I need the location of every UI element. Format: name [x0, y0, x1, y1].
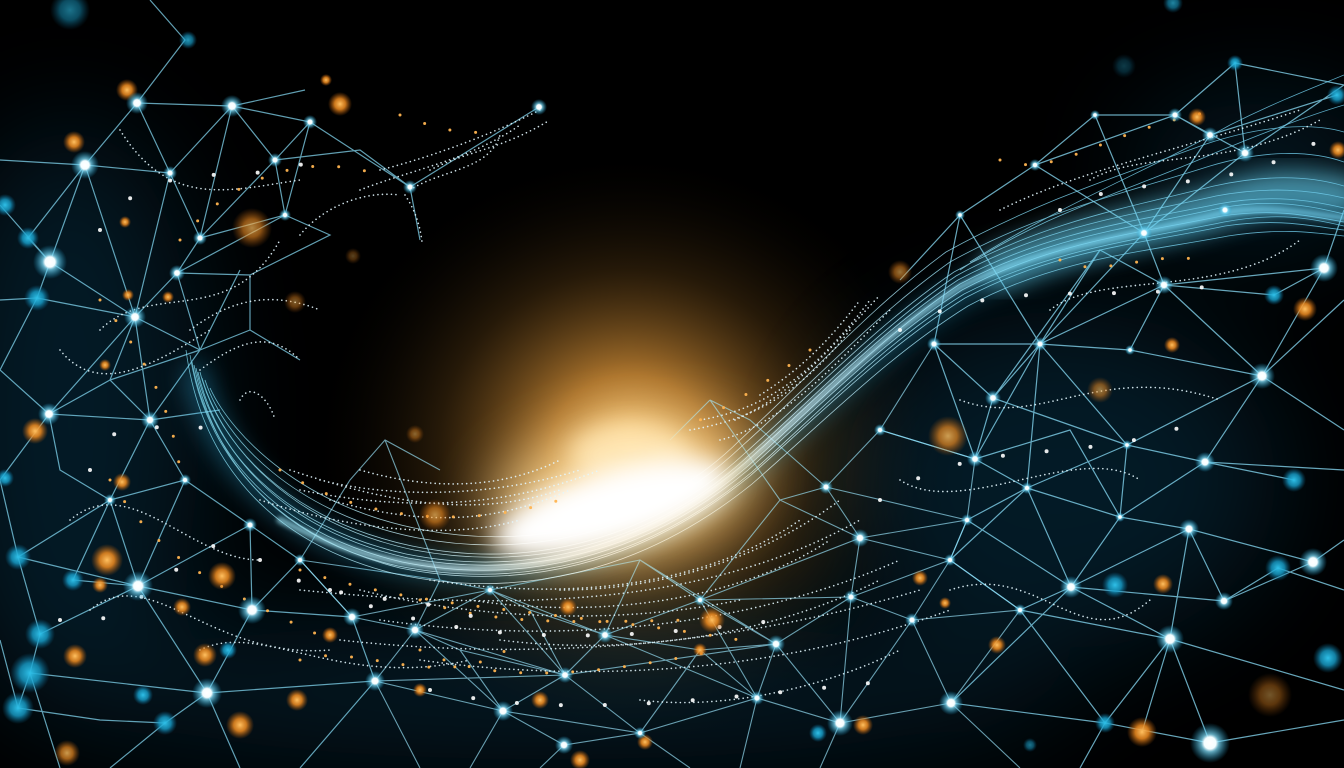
particle dust	[60, 110, 1320, 705]
central golden glow	[310, 150, 950, 750]
network mesh: right cluster	[880, 63, 1344, 768]
network mesh: left cluster	[0, 0, 539, 768]
swoosh wave glow	[195, 190, 1344, 569]
network mesh: bottom centre	[300, 344, 1020, 768]
swoosh strands	[186, 75, 1344, 584]
white-hot core	[480, 404, 760, 578]
